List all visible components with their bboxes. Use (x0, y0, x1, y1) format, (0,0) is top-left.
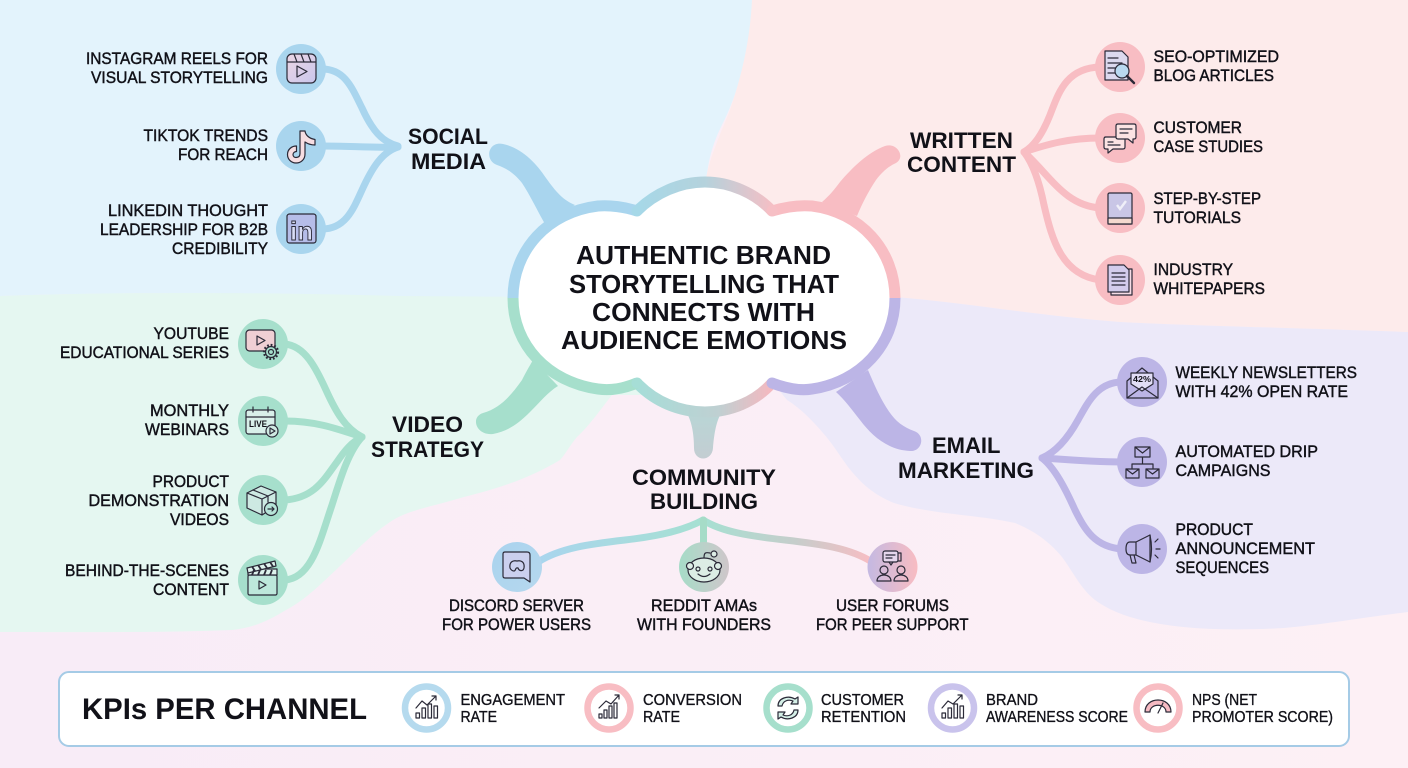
node: monthly webinars: MONTHLY (150, 401, 229, 420)
node: blog articles: SEO-OPTIMIZED (1154, 47, 1279, 66)
KPI: net promoter score: PROMOTER SCORE) (1192, 709, 1333, 726)
node: product announcements (1117, 520, 1315, 577)
node: instagram reels: VISUAL STORYTELLING (91, 68, 268, 87)
node: instagram reels: INSTAGRAM REELS FOR (86, 49, 268, 68)
node: youtube educational series: YOUTUBE (154, 324, 229, 343)
node: reddit amas (637, 542, 771, 634)
KPI: conversion rate (588, 686, 742, 730)
KPI: brand awareness score (931, 686, 1128, 730)
node: product announcements: SEQUENCES (1176, 558, 1269, 577)
node: weekly newsletters: 42% (1133, 374, 1151, 384)
KPI: brand awareness score: AWARENESS SCORE (986, 709, 1128, 726)
KPI: conversion rate: CONVERSION (643, 692, 742, 709)
node: reddit amas: REDDIT AMAs (651, 596, 757, 615)
node: product announcements: ANNOUNCEMENT (1176, 539, 1315, 558)
node: youtube educational series: EDUCATIONAL SERIES (60, 343, 229, 362)
heading: email marketing: MARKETING (898, 458, 1034, 483)
video strategy connectors (285, 344, 362, 580)
node: weekly newsletters: WEEKLY NEWSLETTERS (1176, 363, 1357, 382)
KPI: engagement rate: ENGAGEMENT (460, 692, 565, 709)
heading: community building: BUILDING (650, 489, 758, 514)
central title: AUTHENTIC BRAND (576, 242, 831, 270)
node: product demonstration videos: VIDEOS (170, 510, 229, 529)
node: user forums: USER FORUMS (836, 596, 949, 615)
heading: social media (408, 124, 488, 174)
node: user forums (816, 542, 968, 634)
heading: social media: SOCIAL (408, 124, 488, 149)
KPI: customer retention: RETENTION (821, 709, 906, 726)
node: behind-the-scenes (65, 555, 288, 605)
central cloud (513, 182, 895, 412)
node: tutorials (1095, 183, 1261, 233)
node: tiktok trends: FOR REACH (178, 145, 268, 164)
node: tiktok trends: TIKTOK TRENDS (144, 126, 268, 145)
node: behind-the-scenes: BEHIND-THE-SCENES (65, 561, 229, 580)
node: behind-the-scenes: CONTENT (153, 580, 229, 599)
node: tiktok trends (144, 121, 326, 171)
KPI: net promoter score (1136, 686, 1333, 730)
KPI: conversion rate: RATE (643, 709, 680, 726)
node: product announcements: PRODUCT (1176, 520, 1253, 539)
node: monthly webinars (145, 396, 288, 446)
KPI heading: KPIs PER CHANNEL (82, 693, 367, 726)
node: product demonstration videos: PRODUCT (152, 472, 229, 491)
node: instagram reels (86, 44, 326, 94)
community connectors (538, 520, 872, 562)
panel: social media (86, 44, 488, 258)
heading: social media: MEDIA (411, 149, 486, 174)
email marketing connectors (1042, 382, 1122, 549)
heading: video strategy: STRATEGY (371, 437, 484, 462)
node: automated drip campaigns: AUTOMATED DRIP (1176, 442, 1318, 461)
panel: video strategy (60, 319, 484, 605)
node: blog articles: BLOG ARTICLES (1154, 66, 1274, 85)
KPI: customer retention: CUSTOMER (821, 692, 904, 709)
node: monthly webinars: LIVE (249, 419, 267, 429)
node: reddit amas: WITH FOUNDERS (637, 615, 771, 634)
node: whitepapers (1095, 255, 1265, 305)
panel: community building (442, 465, 968, 634)
heading: community building: COMMUNITY (632, 465, 776, 490)
node: youtube educational series (60, 319, 288, 369)
node: discord server (442, 542, 591, 634)
node: linkedin thought leadership: in (290, 216, 313, 246)
KPI: brand awareness score: BRAND (986, 692, 1038, 709)
node: linkedin thought leadership: LINKEDIN THOUGHT (108, 201, 268, 220)
panel: KPIs per channel (59, 672, 1349, 746)
written content connectors (1024, 67, 1100, 280)
node: discord server: FOR POWER USERS (442, 615, 591, 634)
central title: STORYTELLING THAT (569, 271, 839, 299)
node: blog articles (1095, 42, 1279, 92)
node: case studies: CUSTOMER (1154, 118, 1242, 137)
node: automated drip campaigns (1117, 437, 1318, 487)
central title (561, 242, 847, 355)
branch: community building trunk (685, 410, 723, 458)
node: discord server: DISCORD SERVER (449, 596, 584, 615)
central title: AUDIENCE EMOTIONS (561, 327, 847, 355)
heading: video strategy: VIDEO (392, 412, 463, 437)
KPI: engagement rate (405, 686, 565, 730)
node: whitepapers: WHITEPAPERS (1154, 279, 1265, 298)
node: whitepapers: INDUSTRY (1154, 260, 1233, 279)
node: linkedin thought leadership (100, 201, 326, 258)
node: case studies: CASE STUDIES (1154, 137, 1263, 156)
KPI: engagement rate: RATE (460, 709, 497, 726)
branch: social media trunk (489, 144, 575, 224)
heading: email marketing (898, 433, 1034, 483)
heading: video strategy (371, 412, 484, 462)
KPI: customer retention (766, 686, 906, 730)
central title: CONNECTS WITH (592, 299, 815, 327)
branch: video strategy trunk (476, 360, 558, 434)
panel: email marketing (898, 357, 1357, 577)
node: product demonstration videos (88, 472, 288, 529)
panel: written content (907, 42, 1279, 305)
heading: written content: CONTENT (907, 152, 1017, 177)
node: monthly webinars: WEBINARS (145, 420, 229, 439)
heading: community building (632, 465, 776, 514)
node: user forums: FOR PEER SUPPORT (816, 615, 968, 634)
node: product demonstration videos: DEMONSTRATION (88, 491, 229, 510)
heading: email marketing: EMAIL (932, 433, 1000, 458)
heading: written content (907, 128, 1017, 177)
social media connectors (322, 69, 398, 229)
node: tutorials: STEP-BY-STEP (1154, 189, 1261, 208)
heading: written content: WRITTEN (910, 128, 1013, 153)
node: tutorials: TUTORIALS (1154, 208, 1241, 227)
node: linkedin thought leadership: LEADERSHIP FOR B2B (100, 220, 268, 239)
KPI: net promoter score: NPS (NET (1192, 692, 1257, 709)
node: case studies (1095, 113, 1263, 163)
branch: written content trunk (822, 145, 900, 216)
branch: email marketing trunk (836, 370, 921, 451)
node: automated drip campaigns: CAMPAIGNS (1176, 461, 1270, 480)
node: weekly newsletters: WITH 42% OPEN RATE (1176, 382, 1348, 401)
node: weekly newsletters (1117, 357, 1357, 407)
node: linkedin thought leadership: CREDIBILITY (172, 239, 268, 258)
